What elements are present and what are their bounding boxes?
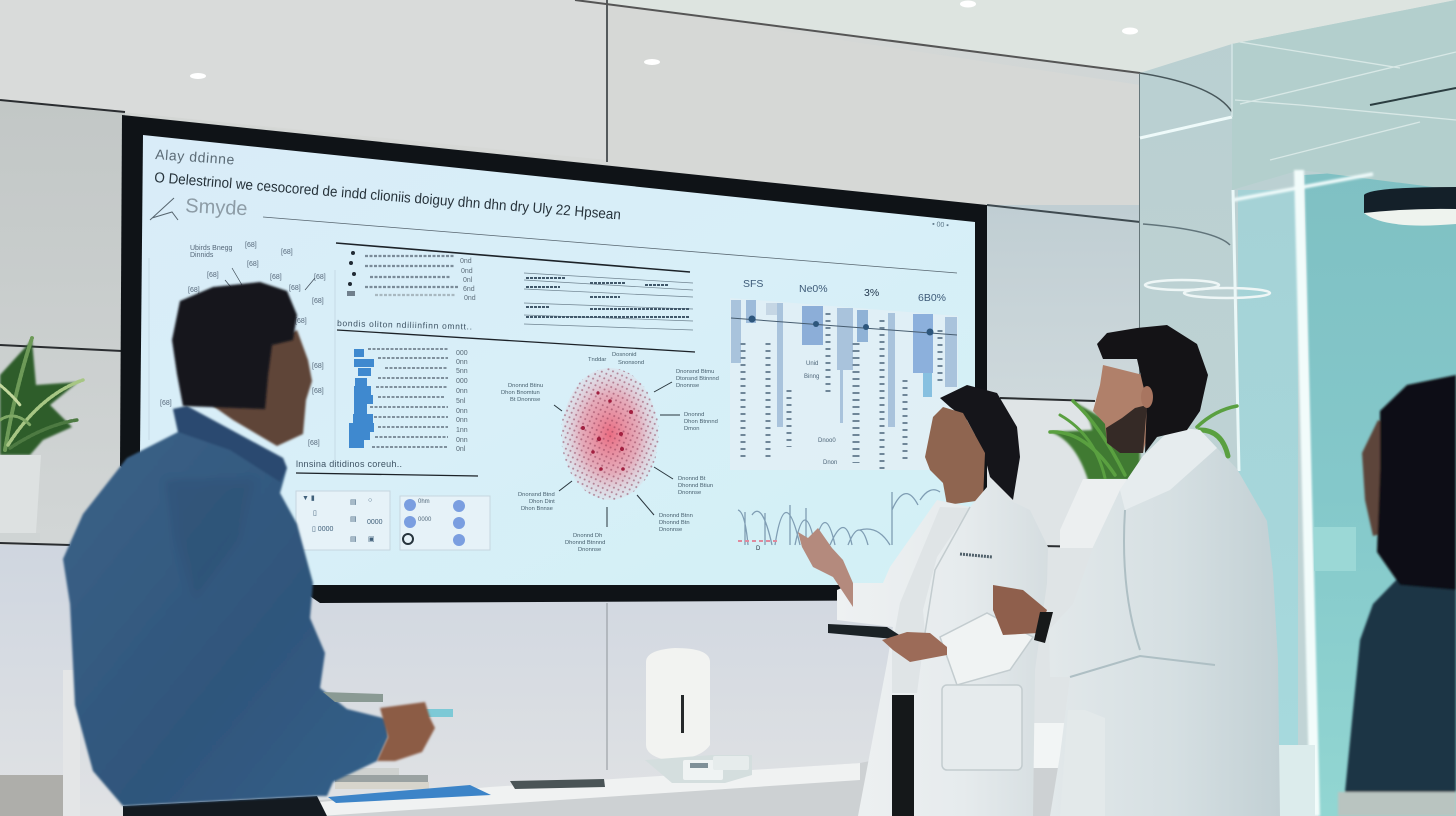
blue horizontal bar list: 000	[456, 378, 468, 385]
ring ceiling lamp	[1145, 280, 1270, 298]
summary card left: 0000	[367, 519, 383, 526]
column chart panel: Dnon	[823, 460, 837, 466]
diagram of labelled nodes at left of screen: [68]	[312, 363, 324, 370]
section heading: summaries	[296, 459, 478, 476]
summary card left: ▼ ▮	[302, 495, 315, 502]
top data list	[336, 243, 690, 302]
diagram of labelled nodes at left of screen: [68]	[308, 440, 320, 447]
diagram of labelled nodes at left of screen: [68]	[281, 249, 293, 256]
diagram of labelled nodes at left of screen: [68]	[295, 318, 307, 325]
KPI percentage headers	[743, 278, 946, 304]
coat details: sleeve and pocket	[925, 507, 1033, 770]
summary card left: ▣	[368, 536, 375, 543]
blue horizontal bar list: 5nl	[456, 398, 466, 405]
pink network cluster	[554, 368, 680, 527]
blue horizontal bar list	[349, 349, 468, 453]
summary card right with circles	[400, 496, 490, 550]
blue horizontal bar list: 0nn	[456, 359, 468, 366]
summary card left: ▤	[350, 536, 357, 543]
top data list: 0nd	[460, 258, 472, 265]
person: woman at right edge	[1338, 375, 1456, 816]
column chart panel: Binng	[804, 374, 819, 380]
column chart panel: Dnoo0	[818, 438, 836, 444]
pendant lamp	[1364, 187, 1456, 226]
network cluster callout labels: Bt Dnonnse	[510, 397, 540, 403]
his hand	[377, 702, 435, 761]
KPI percentage headers: SFS	[743, 278, 763, 290]
diagram of labelled nodes at left of screen: [68]	[314, 274, 326, 281]
person: woman in white coat	[798, 385, 1048, 816]
section heading: list	[337, 318, 695, 352]
diagram of labelled nodes at left of screen: Dinnids	[190, 252, 214, 259]
his hair	[172, 282, 297, 409]
her undershirt	[892, 507, 970, 693]
her coat	[837, 480, 1048, 816]
desk phones	[645, 755, 752, 783]
section heading: list: bondis oliton ndiliinfinn omntt..	[337, 318, 472, 332]
network cluster callout labels: Dhon Dint	[529, 499, 555, 505]
ceiling spot lights	[190, 0, 1359, 79]
network cluster callout labels	[501, 352, 719, 553]
network cluster callout labels: Dhonnd Btiun	[678, 483, 713, 489]
network cluster callout labels: Dnonnse	[578, 547, 601, 553]
dashboard screen	[140, 135, 975, 585]
section heading: summaries: lnnsina ditidinos coreuh..	[296, 459, 402, 469]
white console shelf	[320, 723, 1065, 816]
network cluster callout labels: Dhon Bnnse	[521, 506, 553, 512]
summary card left: ▯	[313, 510, 317, 517]
potted plant left	[0, 338, 83, 541]
top data list: 0nd	[461, 268, 473, 275]
glass partition on the right	[1140, 0, 1456, 816]
his trousers	[123, 796, 327, 816]
blue horizontal bar list: 5nn	[456, 368, 468, 375]
small table	[524, 273, 693, 330]
blue horizontal bar list: 0nn	[456, 408, 468, 415]
blue horizontal bar list: 0nn	[456, 388, 468, 395]
column chart panel: Unid	[806, 361, 818, 367]
top data list: 0nl	[463, 277, 473, 284]
her trousers	[892, 695, 914, 816]
network cluster callout labels: Dnonnd Btnn	[659, 513, 693, 519]
screen heading: ▪ 00 ▪	[932, 221, 950, 229]
summary card left	[296, 491, 390, 550]
diagram of labelled nodes at left of screen: [68]	[160, 400, 172, 407]
blue horizontal bar list: 000	[456, 350, 468, 357]
person: man in white coat	[993, 325, 1280, 816]
blue horizontal bar list: 0nl	[456, 446, 466, 453]
top data list: 6nd	[463, 286, 475, 293]
her face and neck	[925, 407, 985, 505]
diagram of labelled nodes at left of screen: [68]	[312, 388, 324, 395]
KPI percentage headers: 6B0%	[918, 292, 946, 304]
blue horizontal bar list: 1nn	[456, 427, 468, 434]
screen heading	[150, 146, 957, 273]
her hair and ponytail	[940, 385, 1020, 500]
diagram of labelled nodes at left of screen: [68]	[289, 285, 301, 292]
network cluster callout labels: Dnonnse	[676, 383, 699, 389]
network cluster callout labels: Dhonnd Btn	[659, 520, 690, 526]
summary card left: ▤	[350, 499, 357, 506]
his head	[1093, 325, 1208, 453]
potted plant behind coworker	[1050, 401, 1237, 548]
diagram of labelled nodes at left of screen: [68]	[207, 272, 219, 279]
white wall-mounted device	[646, 648, 710, 760]
screen heading: Smyde	[185, 195, 248, 220]
line chart	[738, 490, 940, 552]
blue horizontal bar list: 0nn	[456, 417, 468, 424]
network cluster callout labels: Dhonnd Btnnnd	[565, 540, 605, 546]
network cluster callout labels: Dnonnd Dh	[573, 533, 602, 539]
summary card left: ▤	[350, 516, 357, 523]
wall-mounted display bezel	[120, 115, 987, 603]
network cluster callout labels: Dnonsnd Btnd	[518, 492, 555, 498]
his hand and watch	[993, 585, 1053, 643]
his shirt	[63, 406, 388, 806]
summary card left: ○	[368, 497, 372, 504]
her raised hand	[798, 528, 853, 607]
diagram of labelled nodes at left of screen: [68]	[245, 242, 257, 249]
his phone	[323, 692, 453, 717]
network cluster callout labels: Dosnonid	[612, 352, 636, 358]
KPI percentage headers: 3%	[864, 287, 879, 299]
diagram of labelled nodes at left of screen	[149, 242, 335, 470]
network cluster callout labels: Dhon Bnomtun	[501, 390, 540, 396]
network cluster callout labels: Tnddar	[588, 357, 606, 363]
diagram of labelled nodes at left of screen: [68]	[247, 261, 259, 268]
column chart panel	[730, 298, 958, 470]
tablet	[828, 624, 907, 640]
network cluster callout labels: Snonsond	[618, 360, 644, 366]
screen heading: Alay ddinne	[155, 146, 235, 168]
network cluster callout labels: Dnonsnd Btmu	[676, 369, 714, 375]
network cluster callout labels: Dtonsnd Btinnnd	[676, 376, 719, 382]
network cluster callout labels: Dnonnd Btinu	[508, 383, 543, 389]
network cluster callout labels: Dnonnd Bt	[678, 476, 706, 482]
summary card right with circles: 0hm	[418, 499, 430, 505]
top data list: 0nd	[464, 295, 476, 302]
person: man in blue shirt, from behind	[63, 282, 453, 816]
network cluster callout labels: Dhon Btnnnd	[684, 419, 718, 425]
line chart: D	[756, 546, 761, 552]
diagram of labelled nodes at left of screen: Ubirds Bnegg	[190, 245, 233, 252]
network cluster callout labels: Dnonnse	[659, 527, 682, 533]
network cluster callout labels: Dnonnd	[684, 412, 704, 418]
network cluster callout labels: Dnonnse	[678, 490, 701, 496]
network cluster callout labels: Dmon	[684, 426, 699, 432]
books and blue mat on shelf	[328, 768, 605, 803]
screen heading: O Delestrinol we cesocored de indd clioniis doiguy dhn dhn dry Uly 22 Hpsean	[154, 170, 621, 224]
his neck and face	[213, 330, 312, 446]
diagram of labelled nodes at left of screen: [68]	[312, 298, 324, 305]
diagram of labelled nodes at left of screen: [68]	[188, 287, 200, 294]
blue horizontal bar list: 0nn	[456, 437, 468, 444]
summary card right with circles: 0000	[418, 517, 432, 523]
diagram of labelled nodes at left of screen: [68]	[270, 274, 282, 281]
summary card left: ▯ 0000	[312, 526, 333, 533]
KPI percentage headers: Ne0%	[799, 283, 828, 295]
her lower hand	[882, 632, 947, 662]
